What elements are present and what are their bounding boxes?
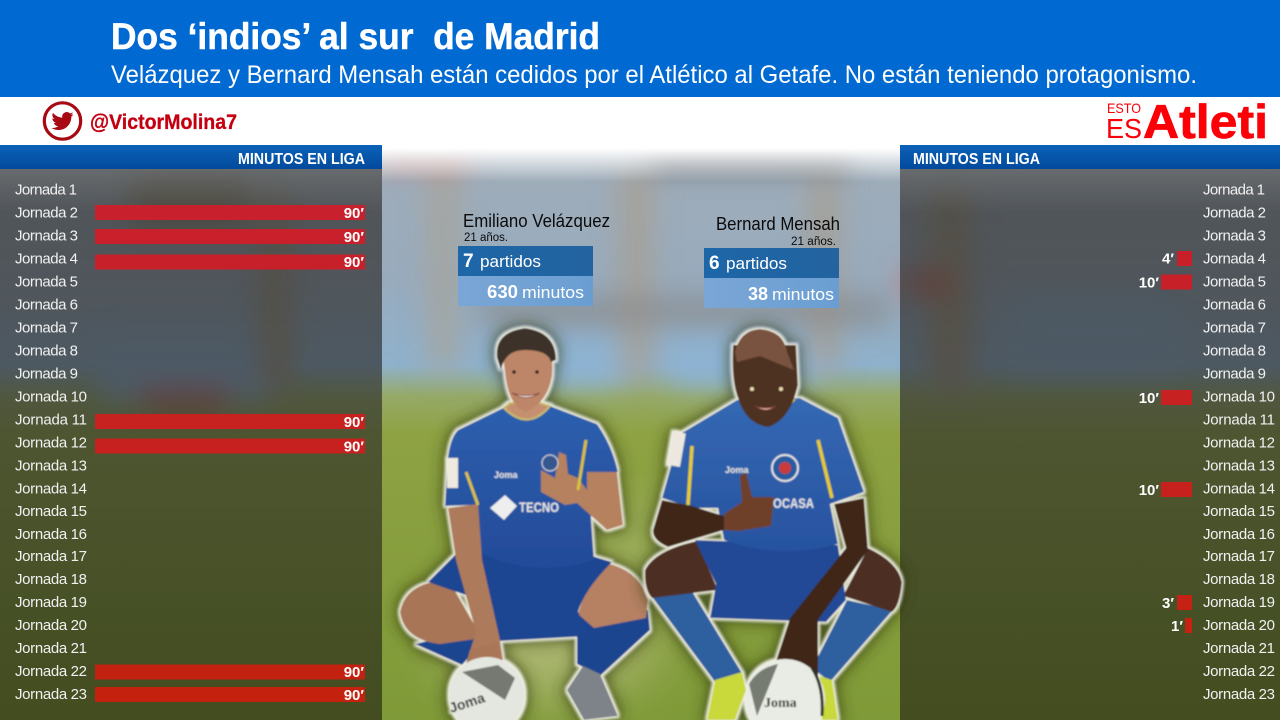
matchday labels: Jornada 10 (15, 388, 87, 406)
minutes stat: minutos (522, 283, 584, 302)
matchday labels: Jornada 10 (1203, 388, 1275, 406)
bar: jornada 23: 90′ (344, 687, 364, 704)
minutes stat (458, 276, 593, 306)
bar: jornada 2: 90′ (344, 205, 364, 222)
bar: jornada 4: 4′ (1162, 250, 1174, 268)
panel heading (0, 145, 382, 169)
matchday labels: Jornada 2 (15, 204, 78, 222)
bar: jornada 14 (1139, 482, 1192, 499)
matchday labels: Jornada 5 (15, 274, 78, 290)
matchday labels: Jornada 14 (15, 480, 87, 498)
matchday labels: Jornada 20 (15, 617, 87, 634)
matchday labels: Jornada 9 (1203, 366, 1266, 382)
bar: jornada 11 (95, 414, 365, 431)
matches stat (704, 248, 839, 278)
matchday labels: Jornada 2 (1203, 204, 1266, 222)
matches stat: partidos (480, 252, 541, 271)
matches stat: 6 (709, 253, 720, 274)
bar: jornada 12: 90′ (344, 438, 364, 456)
bar: jornada 22 (95, 664, 365, 681)
logo: Esto es Atleti: ESTO (1107, 100, 1141, 116)
bar: jornada 4: 90′ (344, 254, 364, 271)
matchday labels: Jornada 7 (1203, 320, 1266, 336)
bar: jornada 3 (95, 229, 365, 246)
matchday labels: Jornada 11 (15, 412, 87, 428)
matchday labels: Jornada 19 (15, 594, 87, 611)
matches stat: partidos (726, 254, 787, 273)
panel heading: MINUTOS EN LIGA (913, 151, 1040, 168)
bar: jornada 12 (95, 438, 365, 456)
player name: Emiliano Velázquez (463, 211, 610, 231)
bar: jornada 11: 90′ (344, 414, 364, 431)
icon: twitter bird (44, 103, 81, 139)
bar: jornada 10 (1139, 390, 1192, 407)
white credit strip (0, 97, 1280, 145)
bar: jornada 5: 10′ (1139, 274, 1159, 292)
matchday labels: Jornada 8 (15, 342, 78, 360)
bar: jornada 19: 3′ (1162, 595, 1174, 612)
matchday labels: Jornada 21 (15, 640, 87, 657)
bar: jornada 19 (1162, 595, 1192, 612)
shirt sponsor: TECNO (519, 499, 559, 515)
player age: 21 años. (791, 236, 836, 248)
photo: Emiliano Velázquez crouching (400, 328, 650, 720)
matches stat (458, 246, 593, 276)
matchday labels (15, 182, 87, 703)
bar: jornada 20: 1′ (1171, 618, 1183, 635)
logo: Esto es Atleti: ES (1106, 113, 1142, 144)
minutes stat: 38 (748, 284, 768, 304)
matchday labels: Jornada 16 (15, 526, 87, 543)
matchday labels: Jornada 4 (15, 250, 78, 268)
matchday labels: Jornada 14 (1203, 480, 1275, 498)
matchday labels: Jornada 23 (1203, 686, 1275, 703)
matchday labels: Jornada 9 (15, 366, 78, 382)
panel heading (900, 145, 1280, 169)
matchday labels: Jornada 15 (15, 503, 87, 520)
player name: Bernard Mensah (716, 214, 840, 234)
panel heading: MINUTOS EN LIGA (238, 151, 365, 168)
matchday labels: Jornada 6 (1203, 296, 1266, 314)
bar: jornada 2 (95, 205, 365, 222)
bar: jornada 23 (95, 687, 365, 704)
matchday labels: Jornada 20 (1203, 617, 1275, 634)
matchday labels: Jornada 15 (1203, 503, 1275, 520)
panel: Mensah minutes (900, 145, 1280, 720)
twitter handle: @VictorMolina7 (90, 111, 237, 134)
subtitle: Velázquez y Bernard Mensah están cedidos por el Atlético al Getafe. No están teniendo protagonismo. (111, 61, 1197, 89)
stats card: Mensah (704, 214, 840, 308)
matchday labels: Jornada 19 (1203, 594, 1275, 611)
stats card: Velázquez (458, 211, 610, 306)
matchday labels: Jornada 1 (1203, 182, 1265, 198)
matchday labels: Jornada 4 (1203, 250, 1266, 268)
matchday labels: Jornada 21 (1203, 640, 1275, 657)
bar: jornada 22: 90′ (344, 664, 364, 681)
matchday labels: Jornada 22 (15, 663, 87, 680)
shirt brand: Joma (725, 465, 750, 475)
bar: jornada 14: 10′ (1139, 482, 1159, 499)
panel: Velázquez minutes (0, 145, 382, 720)
matchday labels: Jornada 18 (15, 571, 87, 588)
ball brand: Joma (764, 696, 797, 711)
matches stat: 7 (463, 251, 474, 272)
bar: jornada 3: 90′ (344, 229, 364, 246)
matchday labels: Jornada 23 (15, 686, 87, 703)
matchday labels: Jornada 16 (1203, 526, 1275, 543)
matchday labels: Jornada 13 (1203, 458, 1275, 474)
matchday labels: Jornada 12 (15, 434, 87, 452)
bar: jornada 4 (1162, 250, 1192, 268)
minutes stat (704, 278, 839, 308)
shirt sponsor: OCASA (773, 495, 814, 511)
bar: jornada 4 (95, 254, 365, 271)
matchday labels: Jornada 11 (1203, 412, 1275, 428)
matchday labels: Jornada 5 (1203, 274, 1266, 290)
title: Dos ‘indios’ al sur de Madrid (111, 16, 600, 57)
header band (0, 0, 1280, 97)
matchday labels: Jornada 12 (1203, 434, 1275, 452)
matchday labels: Jornada 3 (15, 228, 78, 244)
photo: Bernard Mensah crouching (645, 329, 902, 720)
matchday labels: Jornada 22 (1203, 663, 1275, 680)
ball brand: Joma (447, 689, 487, 716)
twitter credit (44, 103, 237, 139)
matchday labels: Jornada 8 (1203, 342, 1266, 360)
matchday labels: Jornada 18 (1203, 571, 1275, 588)
matchday labels: Jornada 3 (1203, 228, 1266, 244)
bar: jornada 10: 10′ (1139, 390, 1159, 407)
matchday labels (1203, 182, 1275, 703)
matchday labels: Jornada 7 (15, 320, 78, 336)
bar: jornada 5 (1139, 274, 1192, 292)
matchday labels: Jornada 17 (1203, 548, 1275, 565)
minutes stat: minutos (772, 285, 834, 304)
logo: Esto es Atleti: Atleti (1143, 95, 1268, 148)
player age: 21 años. (464, 232, 508, 244)
matchday labels: Jornada 6 (15, 296, 78, 314)
matchday labels: Jornada 1 (15, 182, 77, 198)
bar: jornada 20 (1171, 618, 1192, 635)
minutes stat: 630 (487, 282, 518, 302)
shirt brand: Joma (494, 470, 519, 480)
matchday labels: Jornada 13 (15, 458, 87, 474)
matchday labels: Jornada 17 (15, 548, 87, 565)
